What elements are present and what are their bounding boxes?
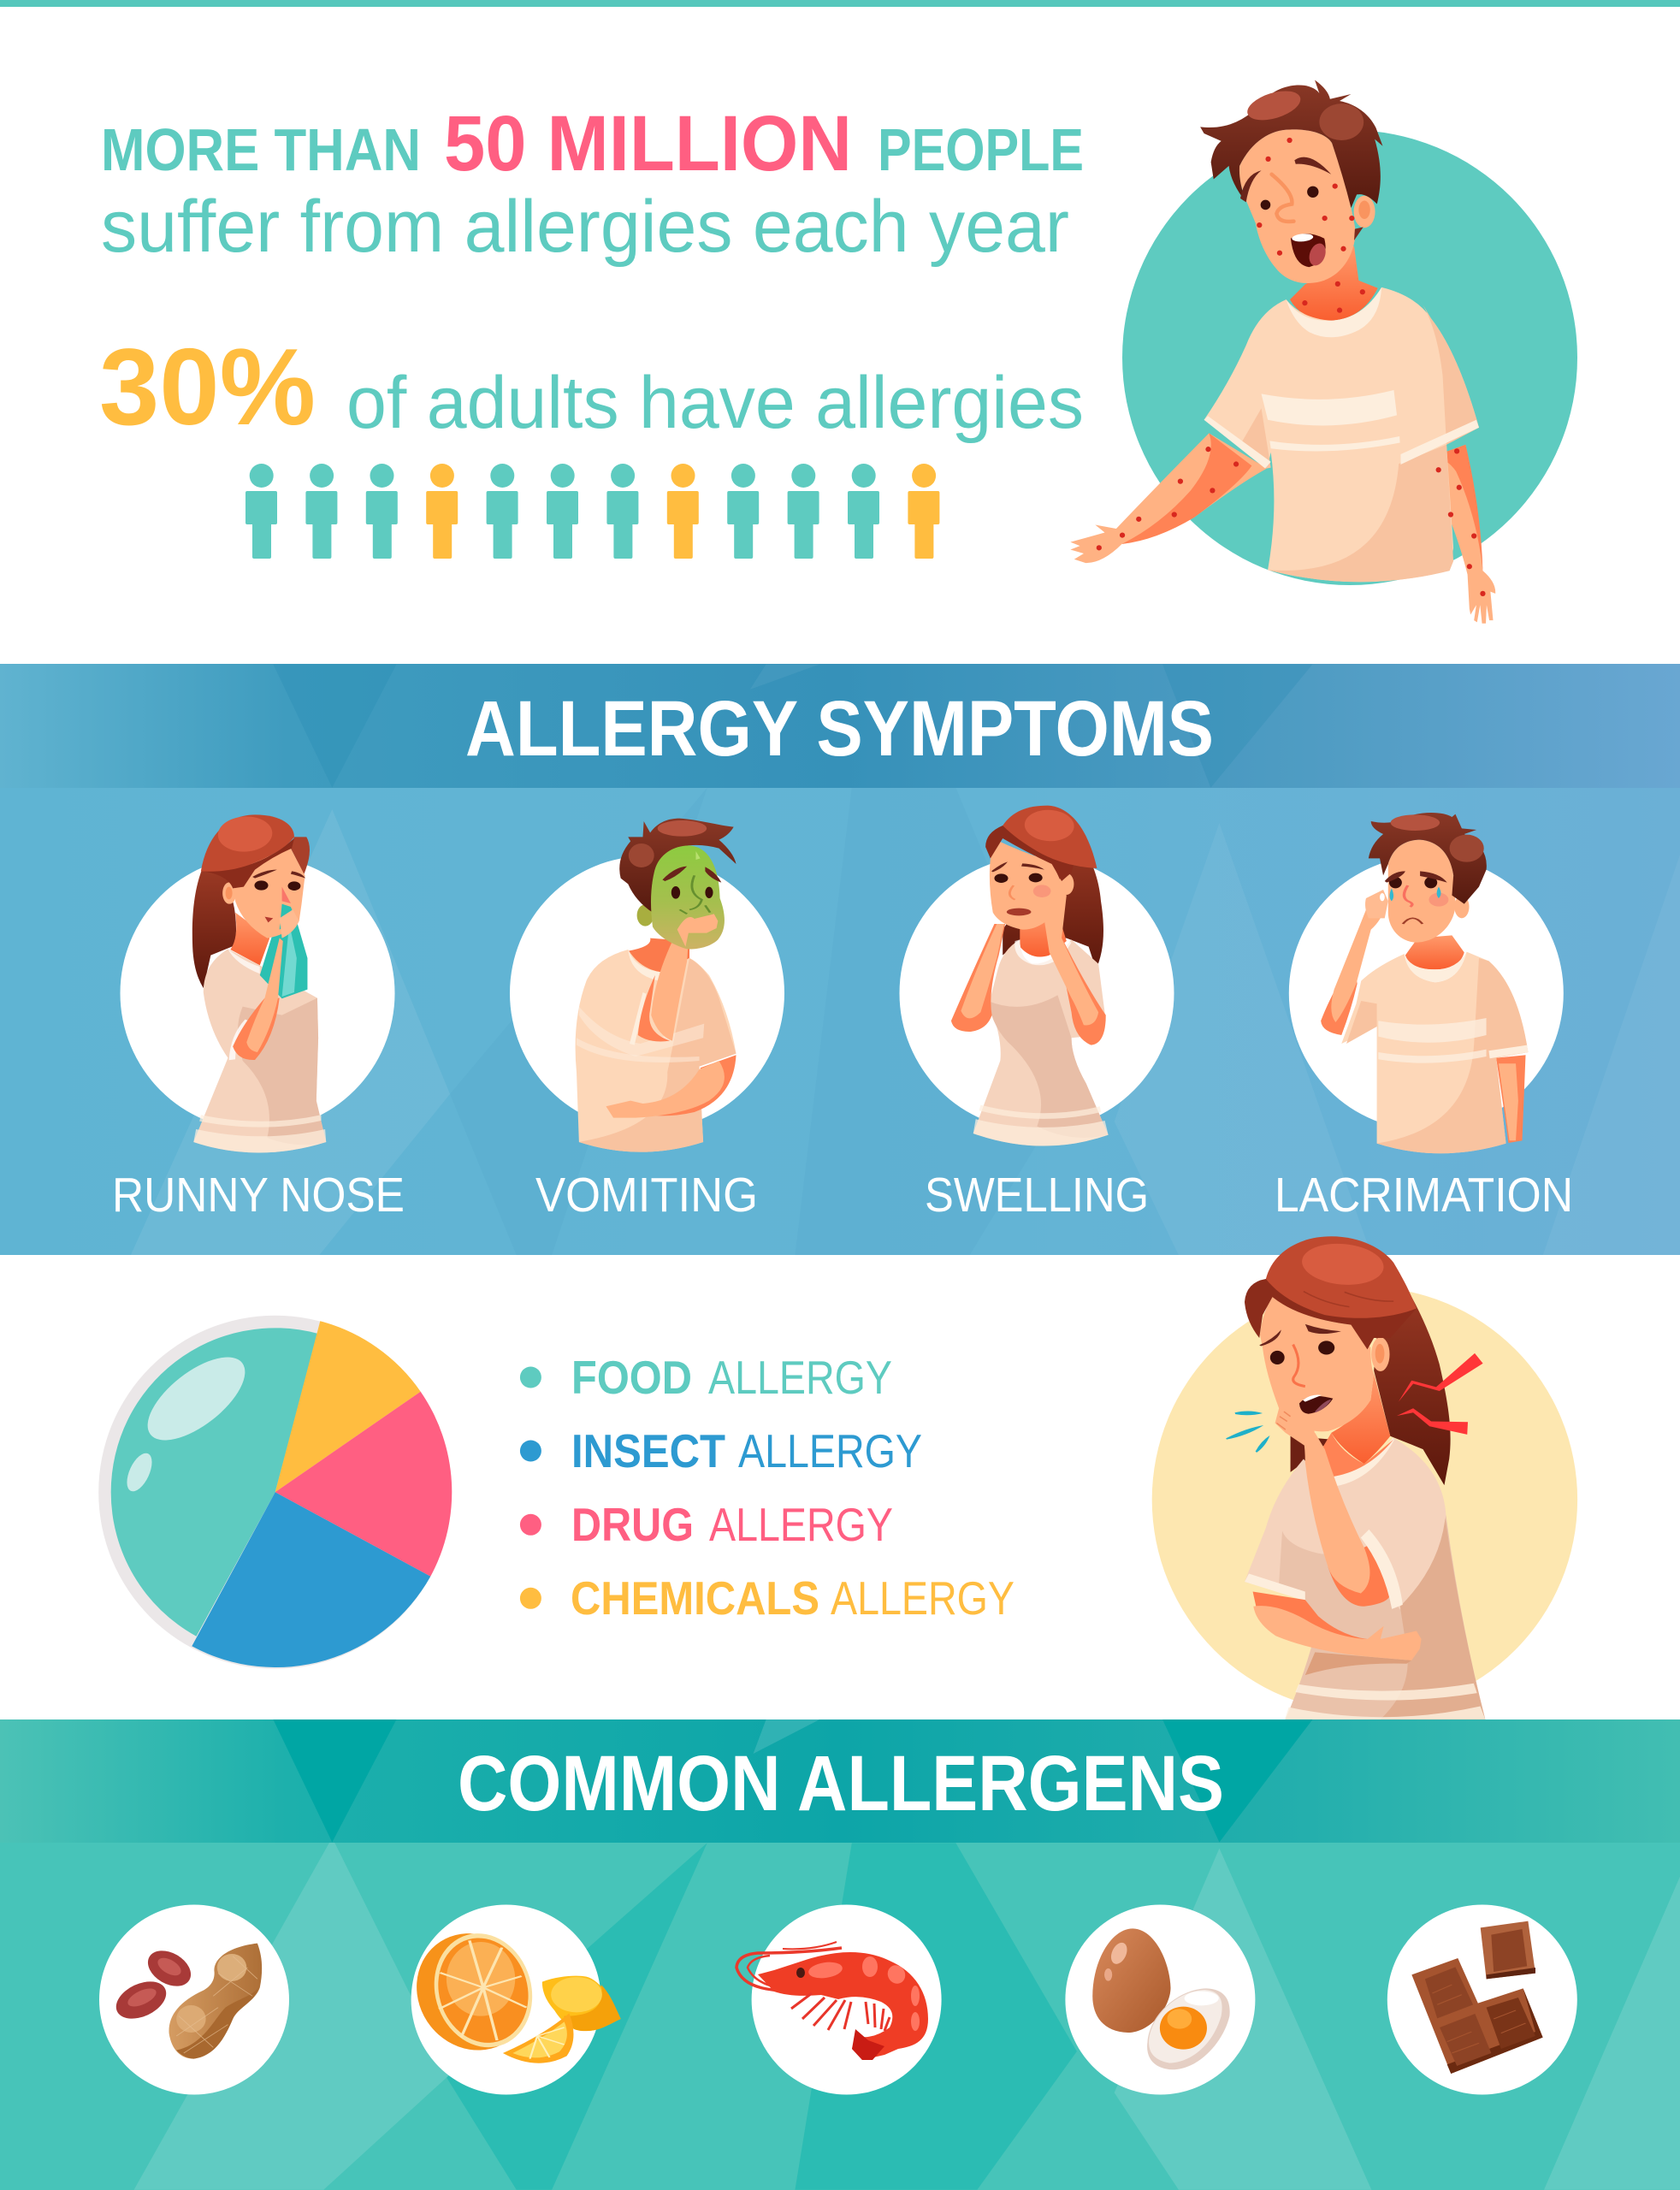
legend item: food [520,1351,892,1404]
heading: allergy symptoms: ALLERGY SYMPTOMS [465,685,1214,772]
yellow sector: chemicals [275,1321,421,1492]
heading band [0,664,1680,788]
stat: 30 percent of adults [99,326,1084,447]
legend item: drug [520,1498,893,1551]
legend [520,1351,1015,1625]
legend item: drug: DRUG [571,1498,694,1551]
band background [0,664,1680,1255]
legend item: insect: ALLERGY [738,1424,922,1477]
symptom: lacrimation [1275,813,1573,1222]
headline: 50 million people [101,100,1084,187]
illustration: coughing woman [1152,1236,1577,1719]
blue sector: insect [192,1492,430,1667]
symptom: vomiting [510,819,784,1222]
legend item: drug: ALLERGY [709,1498,893,1551]
pink sector: drug [275,1392,452,1577]
top accent strip [0,0,1680,7]
allergen: citrus fruit [410,1904,621,2094]
legend item: insect: INSECT [571,1424,725,1477]
allergen: eggs [1065,1904,1255,2094]
heading band [0,1719,1680,1843]
heading: common allergens: COMMON ALLERGENS [458,1740,1224,1827]
label: swelling: SWELLING [925,1168,1149,1222]
panel: statistics [99,100,1084,559]
allergen: chocolate [1387,1904,1577,2094]
pictogram: twelve people [245,464,939,559]
panel: allergy symptoms [0,664,1680,1255]
symptom: swelling [900,806,1174,1222]
legend item: chemicals [520,1571,1015,1625]
stat: 30 percent of adults: of adults have allergies [346,362,1084,444]
legend item: chemicals: CHEMICALS [571,1571,819,1625]
panel: common allergens [0,1719,1680,2190]
panel: allergy types [98,1236,1577,1719]
stat: 30 percent of adults: 30% [99,326,316,447]
legend item: chemicals: ALLERGY [831,1571,1015,1625]
subheading: allergies each year: suffer from allergies each year [101,186,1069,268]
symptom: runny nose [112,814,405,1222]
headline: 50 million people: PEOPLE [878,116,1084,183]
headline: 50 million people: 50 MILLION [444,100,852,187]
pie chart [98,1316,452,1669]
allergen: shrimp [736,1904,942,2094]
legend item: insect [520,1424,922,1477]
illustration: man with rash [1070,80,1577,624]
legend item: food: ALLERGY [708,1351,892,1404]
allergen: peanuts [99,1904,289,2094]
label: lacrimation: LACRIMATION [1275,1168,1573,1222]
label: vomiting: VOMITING [535,1168,758,1222]
teal sector: food [111,1328,318,1637]
label: runny nose: RUNNY NOSE [112,1168,405,1222]
legend item: food: FOOD [571,1351,692,1404]
headline: 50 million people: MORE THAN [101,116,421,183]
band background [0,1719,1680,2190]
